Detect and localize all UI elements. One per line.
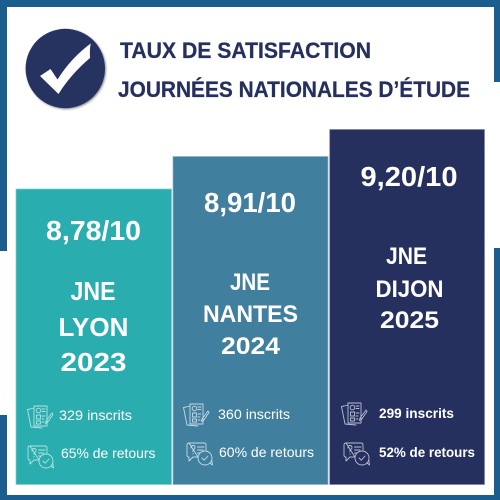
event name: Lyon: JNE bbox=[70, 276, 116, 306]
score: Nantes: 8,91/10 bbox=[204, 187, 296, 218]
event name: Nantes: 2024 bbox=[221, 333, 281, 360]
icon: chat check bbox=[28, 446, 54, 468]
event name: Lyon: 2023 bbox=[60, 347, 126, 377]
icon: chat check bbox=[344, 443, 370, 465]
stat: Dijon responses: 52% de retours bbox=[379, 444, 475, 460]
event name: Dijon: JNE bbox=[386, 243, 427, 270]
panel: JNE Nantes 2024 bbox=[173, 156, 328, 484]
score: Dijon: 9,20/10 bbox=[360, 161, 458, 192]
event name: Nantes: NANTES bbox=[203, 301, 298, 328]
event name: Dijon bbox=[376, 243, 444, 334]
event name: Dijon: DIJON bbox=[376, 276, 444, 303]
icon: check mark badge bbox=[26, 29, 105, 108]
event name: Dijon: 2025 bbox=[380, 307, 439, 334]
title: TAUX DE SATISFACTION bbox=[120, 38, 371, 63]
event name: Nantes: JNE bbox=[230, 269, 270, 296]
stat: Nantes registrations: 360 inscrits bbox=[218, 406, 290, 422]
event name: Lyon: LYON bbox=[58, 312, 128, 342]
event name: Lyon bbox=[58, 276, 128, 377]
title: JOURNÉES NATIONALES D’ÉTUDE bbox=[118, 77, 470, 102]
score: Lyon: 8,78/10 bbox=[46, 215, 141, 246]
stat: Dijon registrations: 299 inscrits bbox=[379, 405, 454, 421]
stat: Lyon registrations: 329 inscrits bbox=[59, 407, 132, 423]
stat: Lyon responses: 65% de retours bbox=[61, 445, 156, 461]
title bbox=[118, 38, 470, 102]
icon: forms bbox=[28, 406, 53, 428]
stat: Nantes responses: 60% de retours bbox=[219, 444, 314, 460]
icon: forms bbox=[184, 404, 209, 426]
icon: forms bbox=[342, 403, 367, 425]
event name: Nantes bbox=[203, 269, 298, 360]
panel: JNE Lyon 2023 bbox=[16, 189, 172, 484]
icon: chat check bbox=[187, 443, 212, 465]
panel: JNE Dijon 2025 bbox=[330, 130, 484, 484]
